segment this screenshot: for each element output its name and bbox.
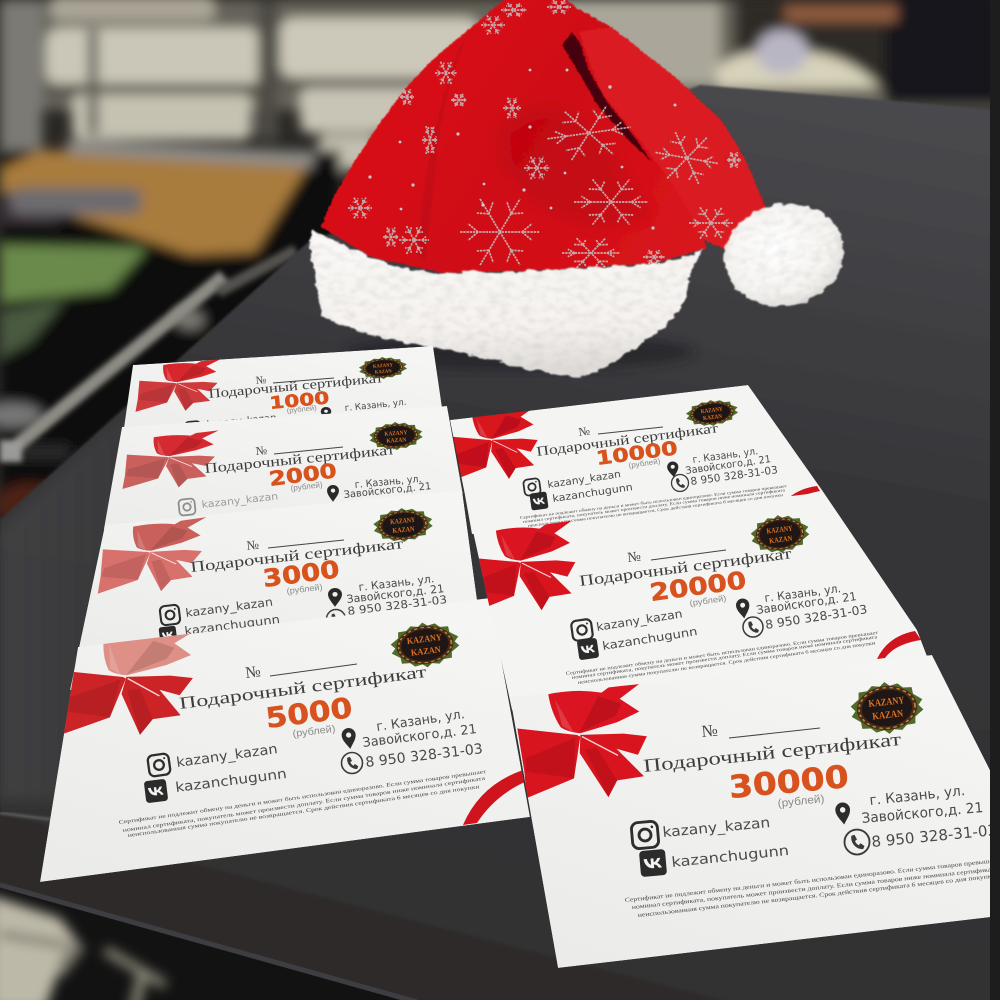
blurred baskets and shelves: [0, 0, 1000, 550]
instagram 30000: kazany_kazan: [662, 815, 771, 841]
fine print 5000: номинал сертификата, покупатель может произвести доплату. Если сумма товаров ниже номинала сертификата: [122, 775, 486, 834]
title 5000: Подарочный сертификат: [178, 662, 428, 713]
value 30000: 30000: [727, 759, 850, 806]
fine print 30000: неиспользованная сумма покупателю не возвращается. Срок действия сертификата 6 месяцев со дня покупки: [637, 872, 997, 919]
address 3000: г. Казань, ул.: [358, 572, 435, 594]
number field 2000: №: [255, 443, 268, 458]
gift certificate 10000: [445, 385, 850, 560]
logo 30000: KAZANY: [868, 695, 906, 710]
logo 1000: KAZAN: [375, 369, 392, 376]
title 3000: Подарочный сертификат: [190, 536, 405, 576]
table front bevel: [0, 813, 735, 1000]
gift certificate 5000: [40, 598, 530, 882]
hat red body: [321, 0, 768, 273]
number field 20000: №: [627, 549, 642, 566]
vk 5000: kazanchugunn: [174, 766, 288, 796]
number field 30000: №: [701, 721, 719, 741]
fine print 20000: Сертификат не подлежит обмену на деньги и может быть использован единоразово. Если сумма товаров превышает: [566, 631, 880, 677]
gift certificate 30000: [510, 655, 1000, 968]
paper sheet of certificate 20000: [465, 490, 940, 710]
title 30000: Подарочный сертификат: [642, 730, 902, 777]
address 10000: Завойского,д. 21: [685, 454, 772, 477]
address 2000: [344, 476, 431, 498]
pin 30000: [835, 802, 852, 825]
phone 3000: 8 950 328-31-03: [347, 593, 448, 618]
logo 5000: KAZANY: [406, 632, 443, 646]
instagram 2000: [178, 491, 279, 516]
logo 5000: [390, 622, 460, 668]
logo 1000: [359, 357, 407, 379]
logo 2000: [370, 422, 422, 450]
bow 3000: [98, 517, 206, 594]
fine print 30000: номинал сертификата, покупатель может произвести доплату. Если сумма товаров ниже номинала сертификата: [631, 866, 999, 911]
fine print 10000: Сертификат не подлежит обмену на деньги и может быть использован единоразово. Если сумма товаров превышает: [520, 483, 787, 520]
number field 30000: [701, 721, 820, 741]
fine print 10000: неиспользованная сумма покупателю не возвращается. Срок действия сертификата 6 месяцев со дня покупки: [528, 492, 784, 528]
fine print 30000: [624, 857, 1000, 919]
pin 3000: [328, 588, 342, 607]
logo 20000: [749, 512, 811, 556]
instagram 3000: [158, 600, 272, 626]
address 30000: г. Казань, ул.: [869, 783, 966, 809]
logo 5000: KAZAN: [410, 644, 442, 658]
currency 1000: (рублей): [286, 404, 317, 415]
bow 2000: [122, 430, 219, 489]
logo 2000: KAZAN: [386, 437, 407, 445]
instagram 5000: kazany_kazan: [175, 741, 279, 771]
logo 10000: KAZANY: [700, 407, 724, 415]
value 10000: 10000: [595, 437, 679, 470]
phone 20000: 8 950 328-31-03: [764, 602, 868, 632]
logo 30000: [848, 678, 926, 738]
corner ribbon 20000: [877, 631, 921, 659]
currency 30000: (рублей): [777, 793, 825, 810]
vk 30000: kazanchugunn: [671, 843, 790, 871]
instagram 10000: [523, 469, 622, 496]
title 10000: Подарочный сертификат: [535, 420, 719, 459]
number field 2000: [256, 446, 343, 455]
value 1000: 1000: [269, 388, 330, 414]
address 20000: Завойского,д. 21: [755, 589, 857, 617]
fine print 20000: номинал сертификата, покупатель может произвести доплату. Если сумма товаров ниже номинала сертификата: [572, 635, 879, 681]
pin 1000: [320, 407, 332, 414]
gift certificate 2000: [104, 406, 463, 529]
dark fold slit: [562, 32, 652, 162]
value 2000: 2000: [268, 458, 338, 491]
address 10000: г. Казань, ул.: [692, 446, 759, 466]
logo 3000: [373, 508, 433, 542]
fine print 20000: неиспользованная сумма покупателю не возвращается. Срок действия сертификата 6 месяцев со дня покупки: [578, 641, 876, 686]
pin 2000: [327, 485, 339, 502]
number field 1000: [256, 376, 334, 384]
instagram 20000: [571, 606, 683, 641]
number field 3000: №: [246, 537, 260, 553]
instagram 10000: kazany_kazan: [547, 469, 622, 491]
address 2000: г. Казань, ул.: [354, 474, 422, 491]
number field 3000: [246, 540, 344, 550]
number field 5000: [245, 664, 358, 678]
pin 5000: [341, 727, 357, 750]
number field 5000: №: [244, 663, 262, 682]
bow 20000: [465, 520, 579, 614]
address 30000: [861, 783, 984, 827]
logo 20000: KAZANY: [766, 523, 793, 536]
title 20000: Подарочный сертификат: [578, 545, 793, 590]
metal bar handle: [0, 250, 296, 462]
bow 5000: [64, 634, 193, 735]
value 20000: 20000: [648, 566, 748, 607]
instagram 5000: [147, 741, 279, 777]
instagram 1000: [185, 416, 276, 423]
vk 3000: [158, 617, 280, 638]
floor beneath table: [0, 885, 417, 1000]
gift certificate 3000: [70, 490, 490, 690]
address 20000: г. Казань, ул.: [764, 581, 842, 605]
address 5000: [362, 707, 478, 751]
vk 10000: kazanchugunn: [552, 482, 634, 505]
gift certificate 1000: [124, 346, 442, 427]
phone 30000: 8 950 328-31-03: [871, 821, 998, 851]
corner ribbon 10000: [787, 486, 820, 499]
logo 3000: KAZAN: [392, 525, 415, 535]
instagram 20000: kazany_kazan: [595, 606, 683, 634]
title 2000: Подарочный сертификат: [204, 443, 395, 477]
hat fur brim: [310, 228, 706, 376]
logo 10000: KAZAN: [703, 414, 723, 422]
vk 20000: [577, 624, 698, 660]
value 3000: 3000: [261, 555, 341, 593]
phone 10000: 8 950 328-31-03: [690, 464, 779, 488]
currency 2000: (рублей): [290, 480, 323, 493]
address 30000: Завойского,д. 21: [861, 800, 984, 827]
currency 5000: (рублей): [292, 723, 336, 740]
address 2000: Завойского,д. 21: [343, 481, 432, 501]
logo 20000: KAZAN: [769, 534, 793, 545]
pin 20000: [735, 598, 751, 619]
bow 10000: [445, 406, 541, 482]
address 1000: г. Казань, ул.: [344, 398, 407, 414]
corner ribbon 5000: [463, 770, 527, 825]
value 5000: 5000: [264, 691, 354, 735]
logo 2000: KAZANY: [384, 430, 408, 438]
fine print 5000: [118, 768, 488, 839]
vk 10000: [529, 482, 634, 511]
fine print 30000: Сертификат не подлежит обмену на деньги и может быть использован единоразово. Если сумма товаров превышает: [624, 857, 1000, 904]
logo 30000: KAZAN: [872, 708, 904, 723]
instagram 3000: kazany_kazan: [185, 595, 274, 620]
logo 1000: KAZANY: [373, 363, 393, 370]
number field 10000: №: [578, 424, 591, 439]
instagram 2000: kazany_kazan: [201, 491, 279, 511]
logo 3000: KAZANY: [390, 516, 415, 526]
vk 5000: [144, 766, 288, 803]
currency 3000: (рублей): [286, 582, 323, 596]
logo 10000: [685, 397, 739, 429]
vk 3000: kazanchugunn: [184, 612, 281, 638]
fine print 5000: Сертификат не подлежит обмену на деньги и может быть использован единоразово. Если сумма товаров превышает: [118, 768, 488, 826]
vk 30000: [639, 843, 790, 877]
santa hat: [310, 0, 853, 376]
phone 5000: 8 950 328-31-03: [365, 741, 484, 771]
hat pompom: [715, 193, 853, 317]
photo background: blurred shop interior: [0, 0, 1000, 560]
number field 20000: [627, 549, 726, 566]
instagram 1000: kazany_kazan: [206, 413, 277, 430]
fine print 10000: [520, 483, 787, 528]
bow 1000: [136, 360, 220, 412]
title 1000: Подарочный сертификат: [208, 370, 384, 401]
phone 20000: [743, 602, 868, 637]
bow 30000: [515, 683, 648, 800]
number field 10000: [578, 424, 663, 439]
address 5000: г. Казань, ул.: [375, 707, 466, 735]
dark strip at right edge of image: [990, 0, 1000, 1000]
address 3000: [346, 576, 444, 603]
number field 1000: №: [255, 374, 267, 387]
address 3000: Завойского,д. 21: [346, 582, 445, 606]
fine print 5000: неиспользованная сумма покупателю не возвращается. Срок действия сертификата 6 месяцев со дня покупки: [127, 783, 480, 839]
gift certificate 20000: [465, 512, 921, 686]
fine print 10000: номинал сертификата, покупатель может произвести доплату. Если сумма товаров ниже номинала сертификата: [523, 487, 786, 525]
currency 20000: (рублей): [689, 593, 727, 608]
fine print 20000: [566, 631, 880, 686]
snowflakes: [348, 0, 766, 268]
pin 10000: [667, 461, 680, 478]
address 5000: Завойского,д. 21: [362, 722, 478, 751]
currency 10000: (рублей): [628, 457, 661, 470]
instagram 30000: [631, 815, 771, 849]
vk 20000: kazanchugunn: [601, 624, 698, 653]
